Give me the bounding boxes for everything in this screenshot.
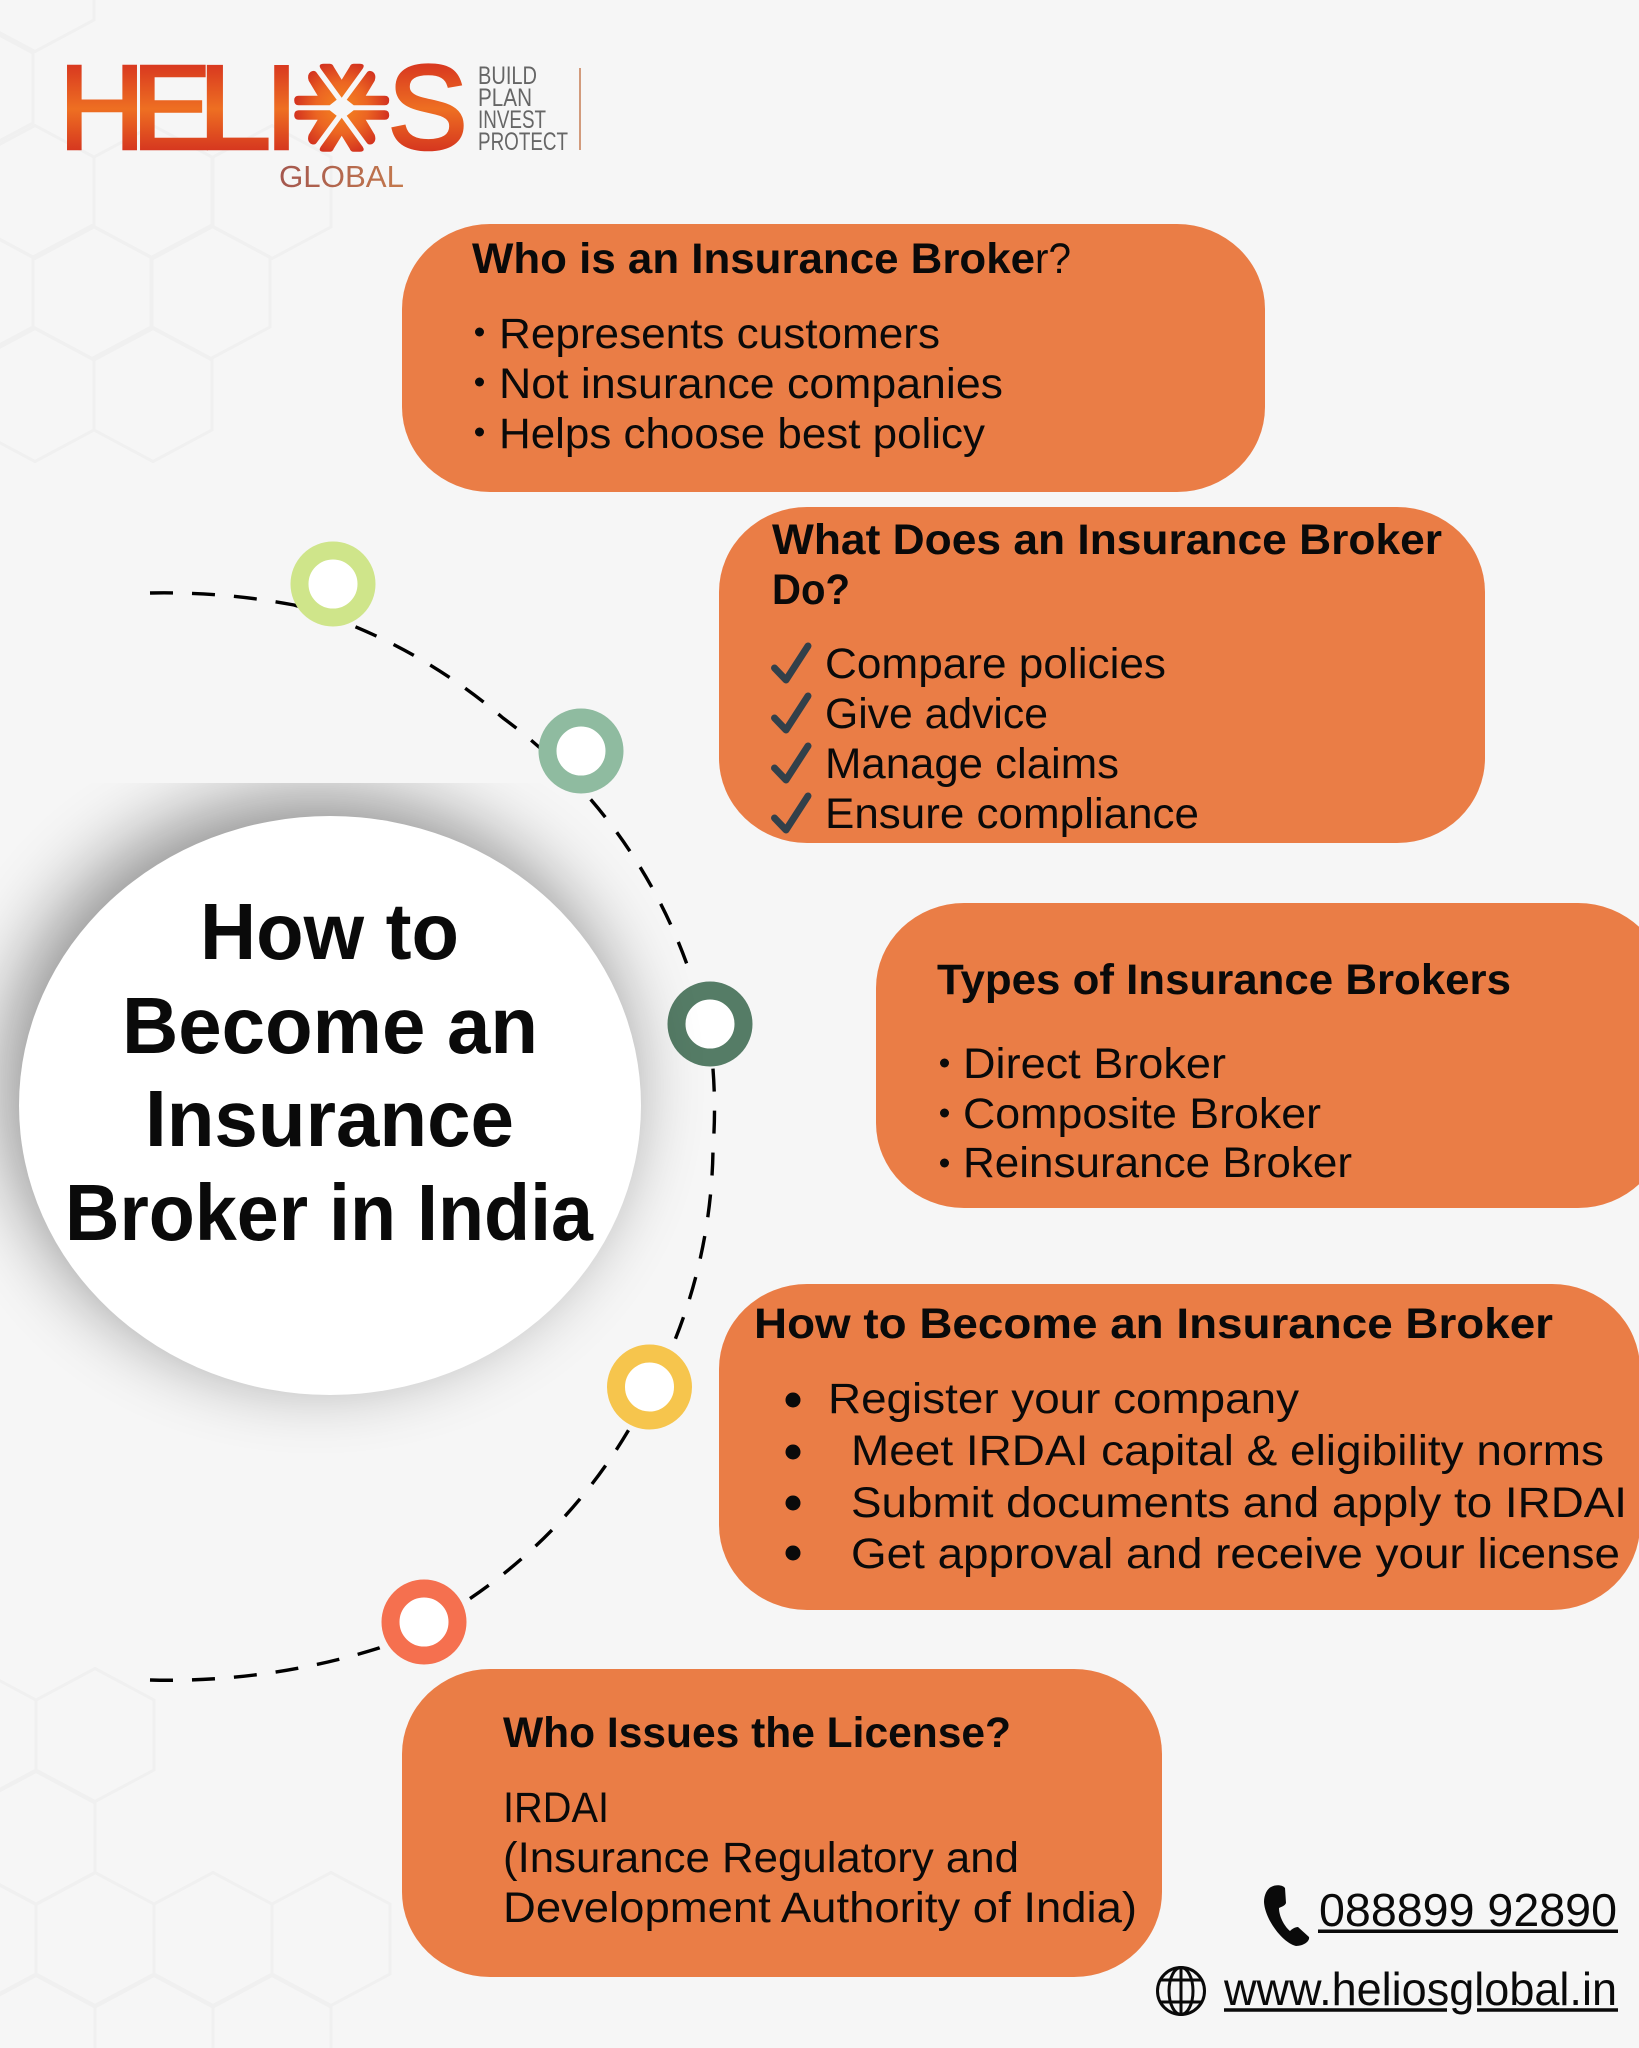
phone number: 088899 92890 (1319, 1884, 1617, 1936)
checklist: Manage claims (825, 741, 1119, 788)
body text: Development Authority of India) (503, 1885, 1137, 1932)
logo wordmark (59, 42, 467, 174)
timeline node: light green (548, 718, 614, 784)
checklist (774, 641, 1199, 838)
body text: (Insurance Regulatory and (503, 1835, 1019, 1882)
timeline node: dark green (676, 990, 744, 1058)
logo wordmark: E (132, 42, 211, 174)
logo tagline (478, 62, 568, 156)
heading: r? (1035, 236, 1071, 283)
heading: How to Become an Insurance Broker (754, 1301, 1553, 1348)
contact: phone (1264, 1884, 1618, 1946)
logo wordmark: H (59, 42, 145, 174)
bullet list (786, 1376, 1627, 1578)
checklist: Give advice (825, 691, 1048, 738)
timeline node: coral (390, 1588, 458, 1656)
title circle (19, 816, 641, 1395)
title: Insurance (145, 1074, 514, 1163)
logo: Helios Global (59, 42, 581, 194)
title: Become an (122, 981, 538, 1070)
heading: Who Issues the License? (503, 1710, 1011, 1757)
timeline node: yellow (616, 1354, 683, 1420)
bullet list: Helps choose best policy (499, 411, 986, 458)
bullet list: Not insurance companies (499, 361, 1003, 408)
title (65, 887, 593, 1257)
heading: Types of Insurance Brokers (937, 957, 1511, 1004)
panel: who issues the license (402, 1669, 1162, 1977)
icon: phone (1264, 1885, 1309, 1946)
logo wordmark: S (388, 42, 467, 174)
contact: website (1158, 1963, 1618, 2015)
panel: how to become an insurance broker (719, 1284, 1639, 1610)
bullet list: Register your company (828, 1376, 1300, 1423)
logo tagline: PROTECT (478, 128, 568, 156)
bullet list: Composite Broker (963, 1091, 1321, 1138)
heading: Who is an Insurance Broke (472, 236, 1035, 283)
heading (772, 517, 1442, 614)
logo wordmark: I (265, 42, 298, 174)
panel: types of insurance brokers (876, 903, 1639, 1208)
heading: Do? (772, 567, 850, 614)
logo wordmark: L (198, 42, 271, 174)
icon: globe (1158, 1968, 1204, 2014)
bullet list: Meet IRDAI capital & eligibility norms (851, 1428, 1604, 1475)
bullet list: Submit documents and apply to IRDAI (851, 1480, 1627, 1527)
logo tagline: INVEST (478, 106, 546, 134)
website url: www.heliosglobal.in (1223, 1963, 1617, 2015)
heading: What Does an Insurance Broker (772, 517, 1442, 564)
dashed timeline arc (150, 593, 715, 1680)
logo tagline: PLAN (478, 84, 532, 112)
body text (503, 1785, 1137, 1932)
body text: IRDAI (503, 1785, 609, 1832)
bullet list: Get approval and receive your license (851, 1531, 1620, 1578)
checklist: Compare policies (825, 641, 1166, 688)
bullet list (475, 311, 1003, 458)
title: Broker in India (65, 1168, 593, 1257)
logo tagline: BUILD (478, 62, 537, 90)
checklist: Ensure compliance (825, 791, 1199, 838)
bullet list: Direct Broker (963, 1041, 1226, 1088)
bullet list: Represents customers (499, 311, 940, 358)
logo star icon (294, 64, 389, 152)
bullet list (940, 1041, 1352, 1187)
timeline node: lime (300, 550, 366, 618)
logo subtitle: GLOBAL (279, 159, 404, 194)
panel: who is an insurance broker (402, 224, 1265, 492)
title: How to (200, 887, 459, 976)
panel: what does an insurance broker do (719, 507, 1485, 843)
bullet list: Reinsurance Broker (963, 1140, 1352, 1187)
